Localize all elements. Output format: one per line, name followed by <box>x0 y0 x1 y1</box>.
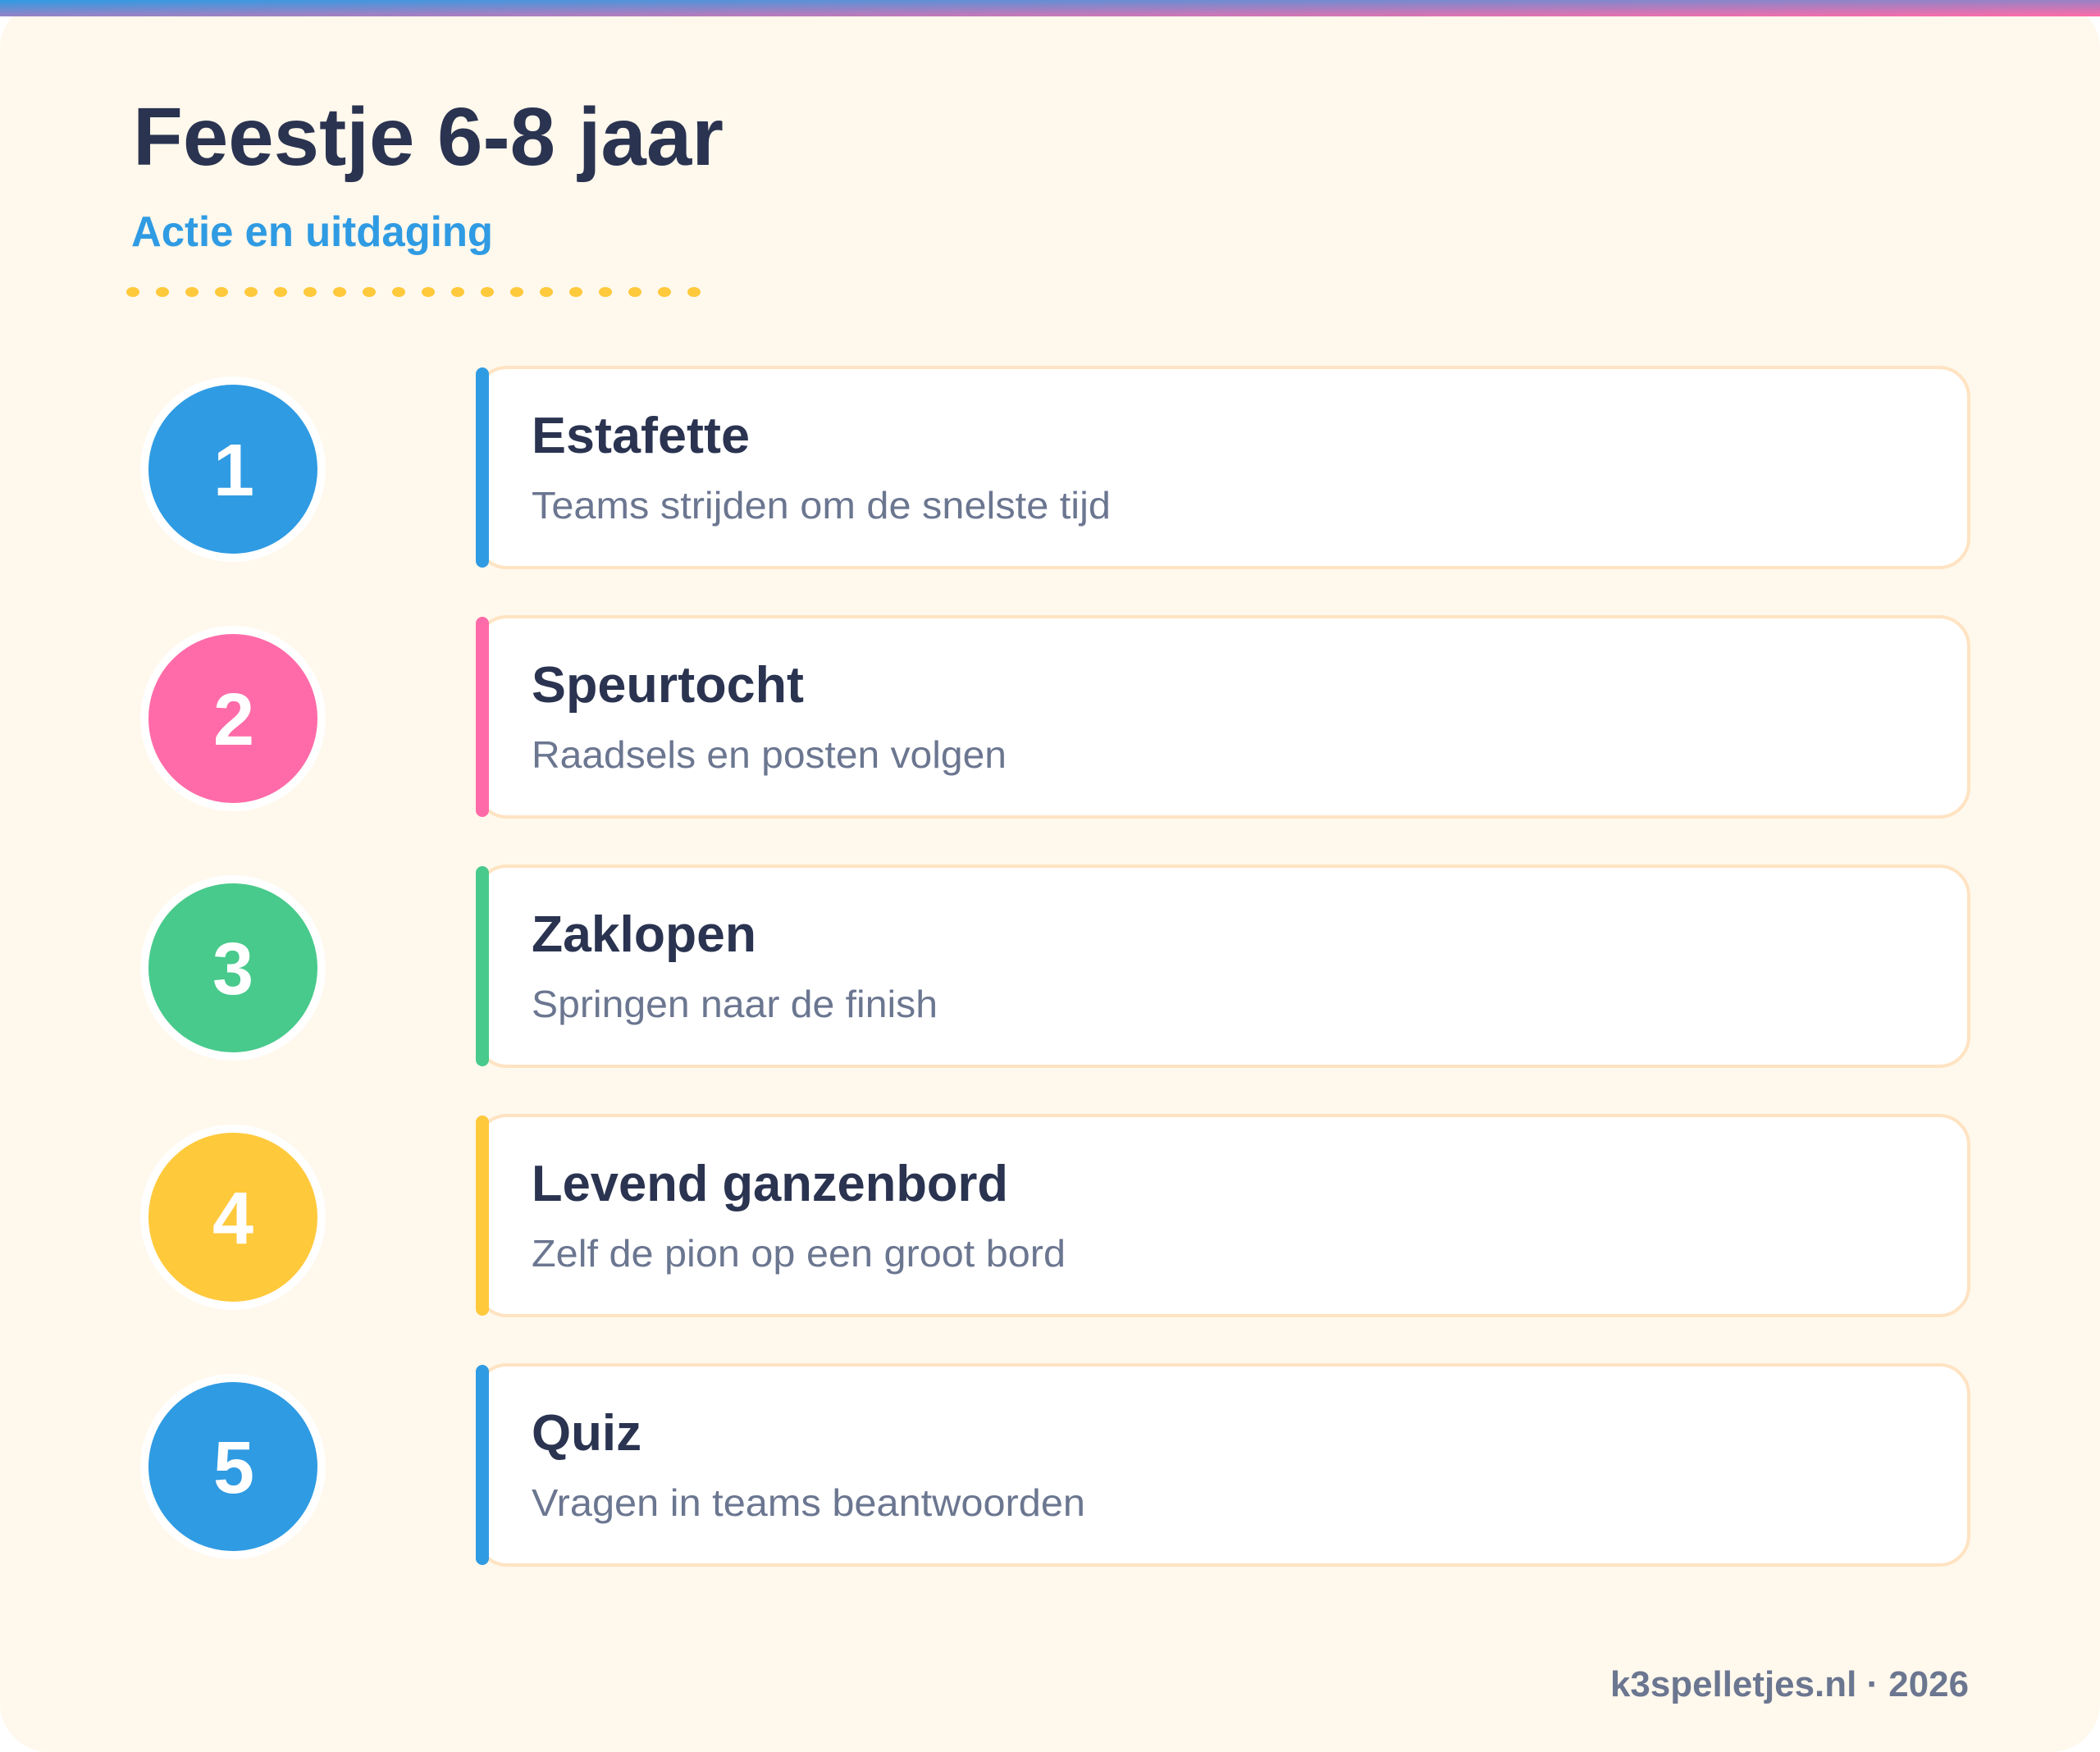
list item 5: Quiz <box>144 1365 1969 1565</box>
card 4 description: Zelf de pion op een groot bord <box>532 1232 1066 1275</box>
number badge 2 <box>144 630 322 807</box>
subtitle: Actie en uitdaging <box>131 208 493 256</box>
card 1 <box>477 367 1969 568</box>
card 4 <box>477 1116 1969 1316</box>
number badge 4: 4 <box>212 1178 253 1260</box>
card 5 <box>477 1365 1969 1565</box>
list item 2: Speurtocht <box>144 617 1969 817</box>
number badge 5: 5 <box>213 1427 254 1509</box>
card 2 <box>477 617 1969 817</box>
dotted divider <box>126 287 701 297</box>
card 3 description: Springen naar de finish <box>532 983 938 1025</box>
card 4 accent bar <box>476 1116 489 1316</box>
card 5 accent bar <box>476 1365 489 1565</box>
card 4 heading: Levend ganzenbord <box>532 1156 1008 1212</box>
card 3 <box>477 866 1969 1066</box>
number badge 3: 3 <box>212 928 253 1011</box>
number badge 5 <box>144 1378 322 1555</box>
title: Feestje 6-8 jaar <box>133 91 724 183</box>
list item 4: Levend ganzenbord <box>144 1116 1969 1316</box>
card 2 description: Raadsels en posten volgen <box>532 733 1007 776</box>
number badge 1: 1 <box>213 430 254 512</box>
card 2 accent bar <box>476 617 489 817</box>
number badge 4 <box>144 1129 322 1306</box>
list item 1: Estafette <box>144 367 1969 568</box>
card 5 heading: Quiz <box>532 1405 641 1462</box>
number badge 3 <box>144 879 322 1056</box>
card 1 accent bar <box>476 367 489 568</box>
card 3 heading: Zaklopen <box>532 906 756 963</box>
card 3 accent bar <box>476 866 489 1066</box>
number badge 1 <box>144 381 322 558</box>
list item 3: Zaklopen <box>144 866 1969 1066</box>
top gradient bar <box>0 0 2100 16</box>
number badge 2: 2 <box>213 679 254 761</box>
card 1 description: Teams strijden om de snelste tijd <box>532 484 1111 527</box>
card 2 heading: Speurtocht <box>532 657 804 714</box>
footer: k3spelletjes.nl · 2026 <box>1610 1664 1969 1704</box>
card 1 heading: Estafette <box>532 408 750 464</box>
card 5 description: Vragen in teams beantwoorden <box>532 1481 1085 1524</box>
